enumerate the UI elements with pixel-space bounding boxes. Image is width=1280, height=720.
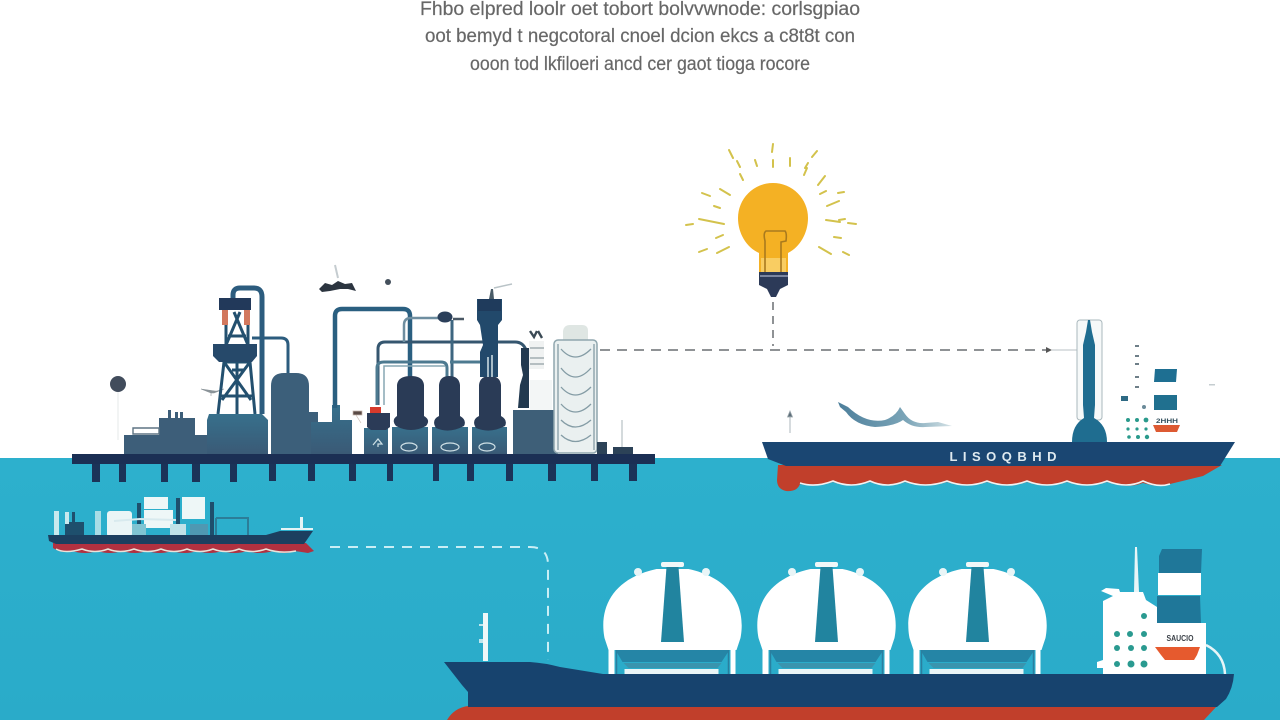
red lower hull	[777, 465, 1222, 491]
teal process blocks	[364, 427, 507, 454]
bridge windows	[1114, 613, 1148, 668]
left low blocks	[124, 410, 209, 454]
platform deck	[72, 454, 655, 464]
ship bow mast	[281, 517, 313, 530]
background sea	[0, 458, 1280, 720]
title text block: ooon tod lkfiloeri ancd cer gaot tioga rocore	[470, 54, 810, 75]
dashed connector: plant to tanker	[600, 302, 1078, 353]
pipe base block	[311, 405, 352, 454]
offshore LNG plant	[72, 265, 655, 482]
bulb rays	[686, 144, 856, 255]
top icon	[319, 265, 356, 292]
small sphere on pole	[110, 376, 126, 440]
block emblems	[373, 439, 495, 451]
instrument tower	[529, 331, 552, 410]
icon: light bulb	[686, 144, 856, 297]
small dot	[385, 279, 391, 285]
title text block: oot bemyd t negcotoral cnoel dcion ekcs a c8t8t con	[425, 26, 855, 47]
thermometer mast	[1072, 320, 1107, 442]
platform legs	[92, 464, 637, 482]
bow mast	[479, 613, 488, 661]
ship name: LISOQBHD	[950, 449, 1056, 464]
navy upper hull	[444, 662, 1234, 707]
small arrow	[788, 411, 792, 433]
separator ball valve	[438, 312, 464, 322]
bulb glass	[738, 183, 808, 272]
cabin red lifeboat	[1153, 425, 1180, 432]
right dark tower	[518, 348, 529, 408]
filament	[764, 231, 786, 272]
ship navy hull	[48, 531, 313, 544]
right block	[513, 410, 558, 454]
storage tank	[271, 373, 318, 454]
bridge label: SAUCIO	[1166, 634, 1194, 643]
LNG sphere tank 1	[603, 562, 742, 675]
small deck equipment	[597, 420, 633, 454]
stacked cryogenic tank	[554, 325, 597, 453]
derrick base	[207, 414, 268, 454]
process pipes	[335, 309, 526, 408]
funnel and cabin panels	[1121, 369, 1177, 410]
ship red hull	[53, 543, 314, 553]
small marker	[353, 411, 362, 423]
pipes behind derrick	[233, 288, 288, 414]
LNG carrier ship bottom	[444, 547, 1234, 720]
ship wave line	[56, 549, 296, 552]
hull wave line	[800, 481, 1170, 485]
derrick tower	[213, 298, 257, 414]
mast dots	[1135, 345, 1215, 388]
cabin windows	[1126, 418, 1149, 439]
ship cargo	[54, 497, 248, 537]
red lower hull	[447, 706, 1217, 720]
swoosh	[838, 402, 952, 427]
navy upper hull	[762, 442, 1235, 466]
reactor vessels	[394, 376, 506, 431]
bulb neck highlight	[761, 258, 786, 272]
cabin label: 2HHH	[1156, 418, 1178, 425]
LNG sphere tank 2	[757, 562, 896, 675]
small cargo ship left	[48, 497, 314, 553]
flying marker	[201, 389, 224, 396]
funnel	[1159, 549, 1202, 573]
reactor: small red unit	[367, 407, 390, 430]
stern rail	[1206, 645, 1225, 674]
lifeboat	[1155, 647, 1200, 660]
dashed connector: small ship to carrier	[330, 547, 548, 660]
tall column	[477, 284, 512, 377]
bulb base	[759, 272, 788, 297]
LNG sphere tank 3	[908, 562, 1047, 675]
tanker ship upper right	[762, 320, 1235, 491]
title text block	[420, 0, 860, 75]
bridge superstructure	[1097, 547, 1225, 675]
